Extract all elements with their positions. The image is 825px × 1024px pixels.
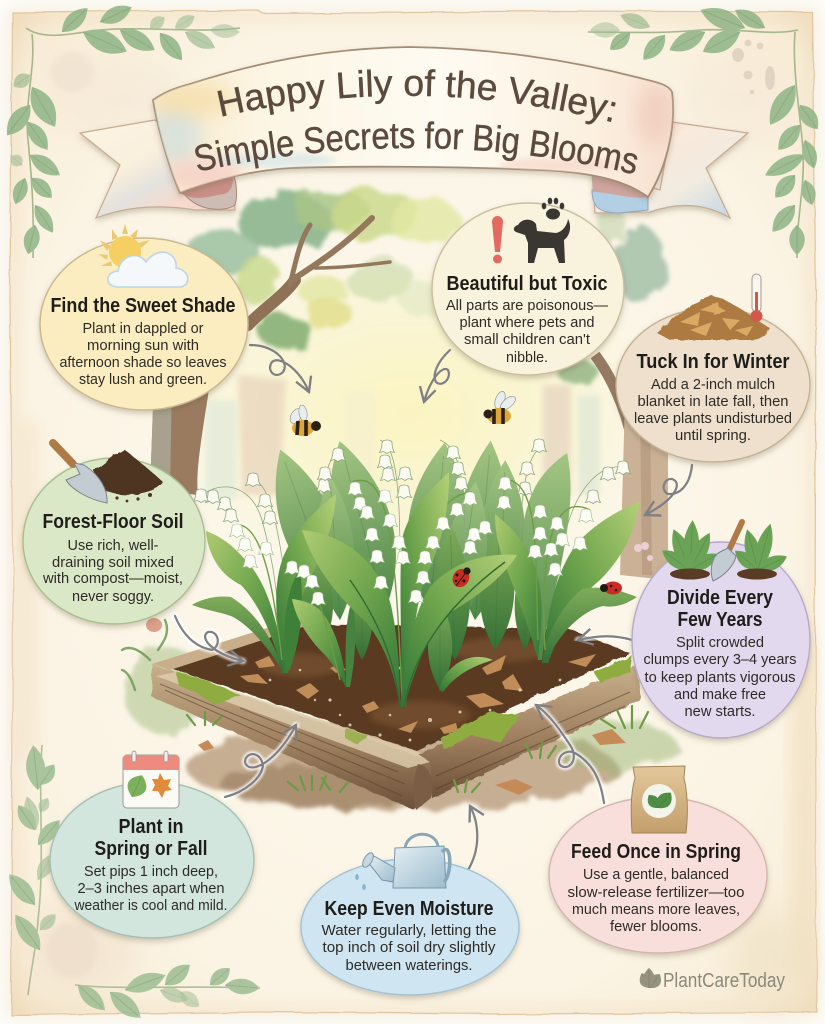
right beam <box>418 665 641 798</box>
center plant <box>302 472 517 707</box>
corner foliage: bottom left <box>3 744 261 1024</box>
heading: Keep Even Moisture <box>324 898 494 920</box>
grass tufts <box>187 706 648 792</box>
body text: afternoon shade so leaves <box>60 354 226 371</box>
panel: forest-floor soil <box>23 443 205 624</box>
body text: much means more leaves, <box>572 901 740 918</box>
arrow: shade to plants <box>250 345 309 392</box>
heading: Plant in <box>118 816 184 838</box>
body text <box>42 537 183 605</box>
heading: Spring or Fall <box>94 838 208 860</box>
body text: Use rich, well- <box>68 537 158 554</box>
body text <box>568 866 744 935</box>
heading: Find the Sweet Shade <box>50 295 236 317</box>
body text: never soggy. <box>72 588 154 605</box>
logo: PlantCareToday <box>636 968 785 992</box>
arrow: plant to bed <box>225 725 296 797</box>
body text: 2–3 inches apart when <box>78 880 224 897</box>
body text <box>74 863 228 914</box>
arrow: moisture to bed <box>468 806 477 870</box>
heading: Few Years <box>678 609 762 631</box>
body text <box>322 922 496 974</box>
icon: watering can <box>355 834 450 890</box>
arrow: divide to bed <box>578 636 632 640</box>
title line 2: Simple Secrets for Big Blooms <box>195 121 638 174</box>
body text <box>634 376 792 444</box>
icon: fertilizer bag <box>631 766 687 833</box>
body text: plant where pets and <box>460 314 594 331</box>
panel: tuck in for winter <box>616 274 810 462</box>
icon: trowel and soil <box>53 443 163 503</box>
icon: logo leaf <box>636 968 665 991</box>
body text: Add a 2-inch mulch <box>651 376 775 393</box>
body text: draining soil mixed <box>52 554 174 571</box>
arrow: winter to plants <box>645 465 692 515</box>
body text: Use a gentle, balanced <box>583 866 729 883</box>
heading: Feed Once in Spring <box>571 841 741 863</box>
icon: sun and cloud <box>98 224 188 287</box>
panel: keep even moisture <box>301 834 519 995</box>
back beam <box>152 618 312 670</box>
heading <box>667 587 774 631</box>
icon: seedlings and trowel <box>658 520 790 581</box>
small front left plant <box>292 599 493 692</box>
body text: and make free <box>674 686 766 703</box>
ladybug on right leaf <box>600 582 622 594</box>
heading: Tuck In for Winter <box>636 351 790 373</box>
ribbon front <box>153 47 673 197</box>
ground leaves <box>198 729 626 795</box>
ribbon folds <box>180 172 648 213</box>
back leaves <box>256 433 535 690</box>
body text: new starts. <box>684 703 756 720</box>
body text: Water regularly, letting the <box>322 922 496 939</box>
ladybug on center leaf <box>449 566 473 590</box>
soil <box>170 624 630 751</box>
body text: Set pips 1 inch deep, <box>84 863 218 880</box>
heading: Divide Every <box>667 587 774 609</box>
ribbon tail left <box>80 120 235 218</box>
logo: PlantCareToday: PlantCareToday <box>663 970 785 992</box>
icon: mulch and thermometer <box>657 274 770 340</box>
body text: nibble. <box>506 349 548 366</box>
title banner <box>78 46 750 258</box>
right plant <box>495 453 640 663</box>
panel: beautiful but toxic <box>432 198 624 375</box>
body text <box>60 320 226 388</box>
heading <box>94 816 208 860</box>
body text: slow-release fertilizer—too <box>568 884 744 901</box>
body text: top inch of soil dry slightly <box>322 939 496 956</box>
corner foliage: top right <box>588 1 824 258</box>
forest background <box>150 190 668 590</box>
arrow: soil to bed <box>175 616 243 661</box>
body text: leave plants undisturbed <box>634 410 792 427</box>
distant pink flowers <box>634 542 653 561</box>
body text: stay lush and green. <box>79 371 207 388</box>
body text: fewer blooms. <box>610 918 702 935</box>
arrow: feed to bed <box>536 705 604 803</box>
lily of the valley plants <box>192 433 640 707</box>
arrow: toxic to plants <box>424 350 450 402</box>
body text <box>644 634 796 720</box>
body text: to keep plants vigorous <box>644 669 796 686</box>
beam end <box>414 764 432 810</box>
body text: All parts are poisonous— <box>446 297 608 314</box>
body text: with compost—moist, <box>42 570 183 587</box>
panel: divide every few years <box>632 520 810 738</box>
faded back blooms <box>194 439 630 660</box>
bee left <box>288 404 321 436</box>
left plant <box>192 494 336 673</box>
flower stems <box>240 480 590 700</box>
left beam <box>152 664 432 810</box>
body text: morning sun with <box>87 337 199 354</box>
heading: Forest-Floor Soil <box>42 511 184 533</box>
body text: blanket in late fall, then <box>638 393 788 410</box>
panel: find the sweet shade <box>40 224 248 410</box>
raised garden bed <box>122 542 675 810</box>
body text: between waterings. <box>346 957 472 974</box>
title line 1: Happy Lily of the Valley: <box>217 69 616 124</box>
ribbon tail right <box>592 122 748 218</box>
bee right <box>484 390 518 424</box>
moss <box>177 656 632 750</box>
body text: Plant in dappled or <box>82 320 204 337</box>
body text: until spring. <box>675 427 751 444</box>
heading: Beautiful but Toxic <box>446 273 608 295</box>
body text: Split crowded <box>676 634 764 651</box>
icon: calendar <box>123 751 179 808</box>
panel: plant in spring or fall <box>50 751 254 938</box>
body text: weather is cool and mild. <box>74 897 228 914</box>
body text: small children can't <box>464 331 591 348</box>
white bell flowers <box>230 477 594 606</box>
body text: clumps every 3–4 years <box>644 651 796 668</box>
body text <box>446 297 608 366</box>
panel: feed once in spring <box>549 766 767 953</box>
corner foliage: top left <box>0 0 240 258</box>
icon: warning and dog <box>492 198 570 264</box>
